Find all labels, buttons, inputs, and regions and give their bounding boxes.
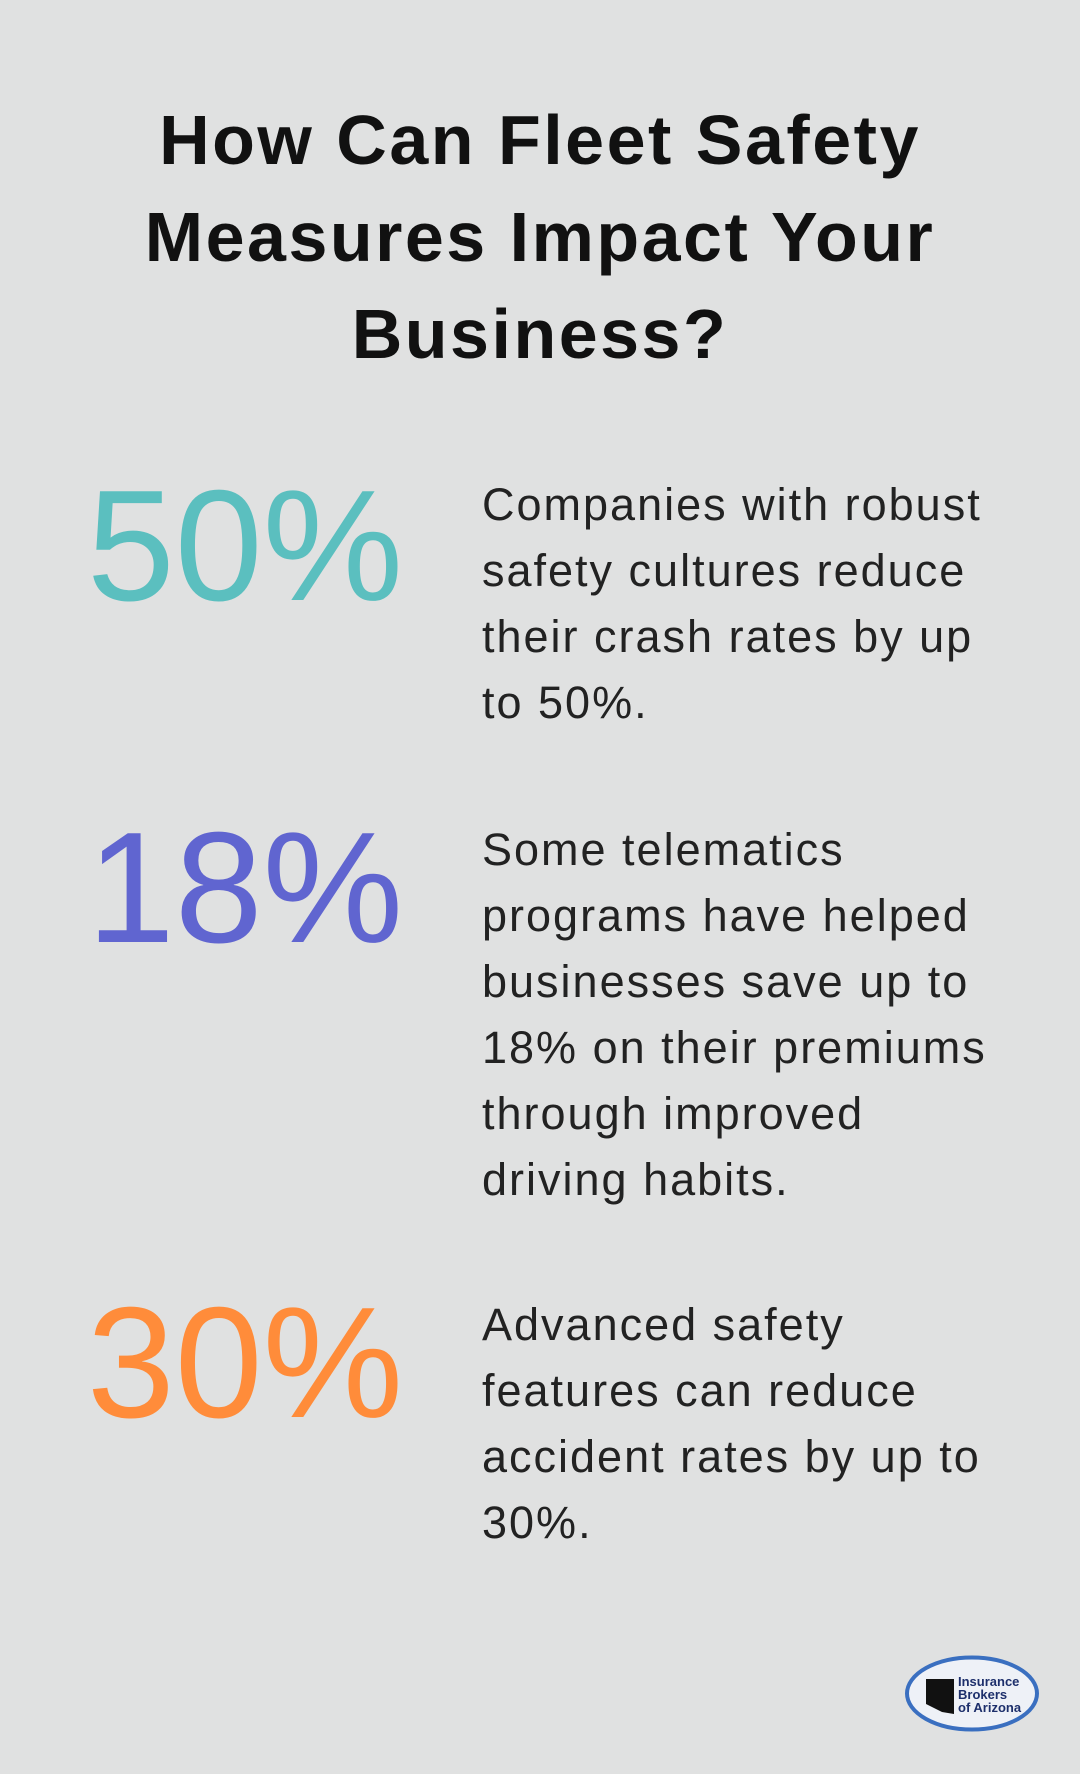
text: 18%: Some telematics [482, 824, 845, 875]
text: 18% [482, 824, 987, 1205]
title: Measures Impact Your [145, 198, 935, 276]
title: How Can Fleet Safety [159, 101, 921, 179]
text: 30%: accident rates by up to [482, 1431, 981, 1482]
text: 50% [482, 479, 982, 728]
text: 50%: safety cultures reduce [482, 545, 966, 596]
stat: 50%: 50% [87, 458, 403, 634]
text: 50%: to 50%. [482, 677, 649, 728]
text: 18%: 18% on their premiums [482, 1022, 987, 1073]
stat: 30%: 30% [87, 1275, 403, 1451]
title [145, 101, 935, 373]
text: 50%: Companies with robust [482, 479, 982, 530]
text: 30%: Advanced safety [482, 1299, 845, 1350]
text: 18%: driving habits. [482, 1154, 790, 1205]
text: 30%: features can reduce [482, 1365, 918, 1416]
text: 18%: programs have helped [482, 890, 970, 941]
text: 50%: their crash rates by up [482, 611, 973, 662]
text: 18%: through improved [482, 1088, 864, 1139]
logo [905, 1656, 1039, 1732]
title: Business? [352, 295, 728, 373]
stat: 18%: 18% [87, 800, 403, 976]
text: 18%: businesses save up to [482, 956, 969, 1007]
logo: Brokers [958, 1687, 1007, 1702]
logo: Insurance [958, 1674, 1019, 1689]
text: 30%: 30%. [482, 1497, 593, 1548]
logo: of Arizona [958, 1700, 1022, 1715]
text: 30% [482, 1299, 981, 1548]
